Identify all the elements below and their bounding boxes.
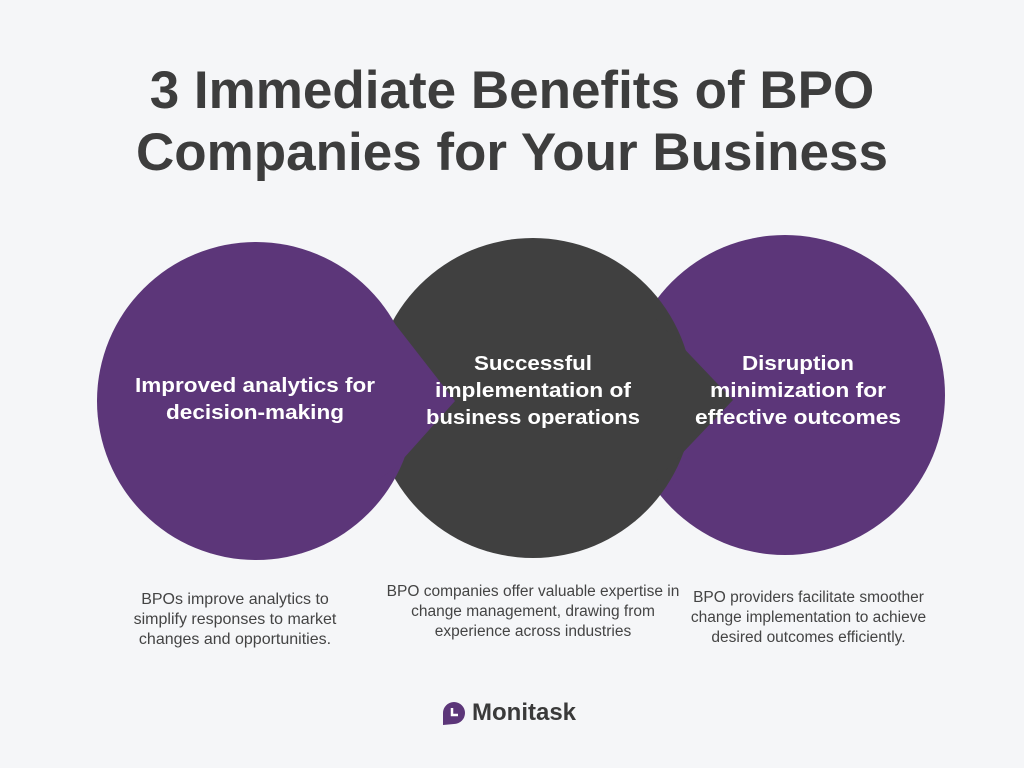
title — [136, 61, 888, 182]
label: disruption minimization — [695, 353, 901, 429]
label: successful implementation — [426, 353, 640, 429]
label: improved analytics — [135, 375, 375, 424]
label: disruption minimization: Disruption — [742, 353, 854, 375]
title: Companies for Your Business — [136, 123, 888, 182]
brand name: Monitask — [472, 699, 576, 726]
label: successful implementation: business operations — [426, 407, 640, 429]
description 2: BPO companies offer valuable expertise in change management, drawing from experience across industries — [387, 583, 679, 640]
label: successful implementation: implementation of — [435, 380, 631, 402]
icon: clock bubble — [443, 702, 465, 725]
label: successful implementation: Successful — [474, 353, 592, 375]
logo — [443, 699, 576, 726]
label: improved analytics: decision-making — [166, 402, 344, 424]
description 1: BPOs improve analytics to simplify responses to market changes and opportunities. — [134, 591, 336, 648]
description 3: BPO providers facilitate smoother change implementation to achieve desired outcomes efficiently. — [691, 589, 926, 646]
title: 3 Immediate Benefits of BPO — [150, 61, 874, 120]
label: disruption minimization: minimization for — [710, 380, 886, 402]
circle: disruption minimization — [625, 235, 945, 555]
circle: successful implementation — [373, 238, 733, 558]
circle: improved analytics — [97, 242, 455, 560]
label: disruption minimization: effective outcomes — [695, 407, 901, 429]
label: improved analytics: Improved analytics for — [135, 375, 375, 397]
